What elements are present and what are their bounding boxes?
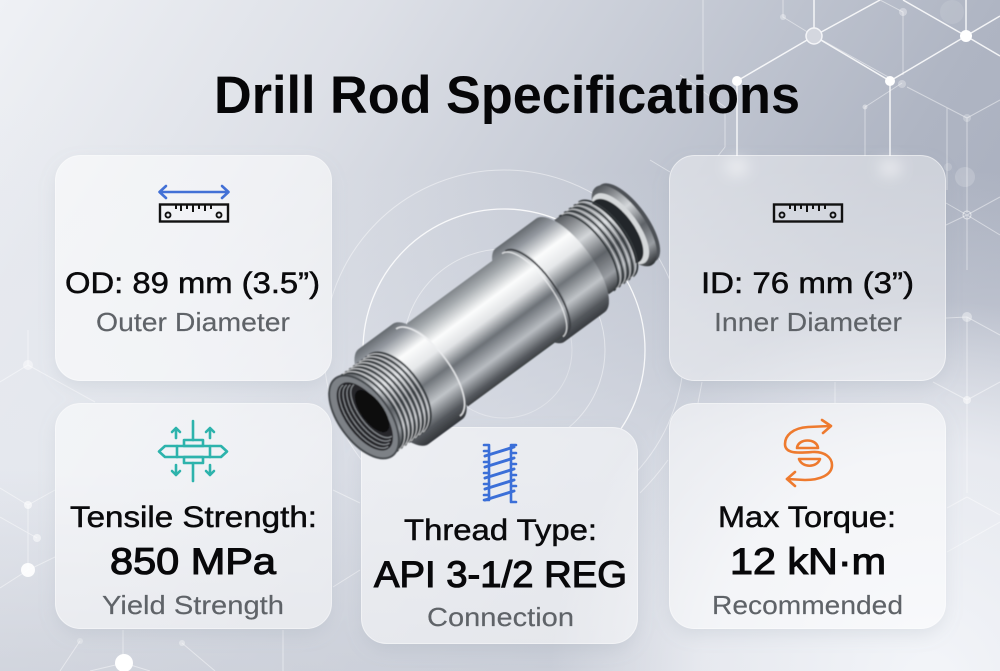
panel: tensile strength	[56, 404, 332, 628]
label: inner diameter: Inner Diameter	[714, 307, 902, 337]
title: Drill Rod Specifications	[214, 66, 800, 125]
concentric rings behind rod	[325, 170, 682, 470]
heading: max torque: Max Torque:	[718, 501, 896, 534]
value: thread type: API 3-1/2 REG	[374, 554, 627, 595]
far collar shoulder	[480, 236, 580, 354]
label: outer diameter: Outer Diameter	[96, 307, 290, 337]
icon: torque arrows	[785, 420, 832, 486]
body	[407, 239, 583, 406]
panel: outer diameter	[56, 156, 332, 380]
panel: torque	[670, 404, 946, 628]
far flange	[575, 173, 672, 280]
body seam	[505, 240, 582, 334]
panel: thread type	[362, 428, 638, 644]
icon: ruler with width arrow	[160, 186, 228, 222]
panel: inner diameter	[670, 156, 946, 380]
near collar	[359, 311, 480, 444]
drill rod	[310, 165, 679, 480]
near collar shoulder	[341, 336, 446, 457]
near collar seam	[396, 316, 478, 416]
heading: thread type: Thread Type:	[404, 514, 597, 547]
label: yield strength: Yield Strength	[102, 590, 284, 620]
label: recommended: Recommended	[712, 590, 903, 620]
near thread	[336, 340, 445, 455]
value: torque: 12 kN·m	[730, 541, 886, 582]
rod opening	[315, 364, 413, 470]
card glow	[725, 158, 902, 177]
icon: ruler	[774, 204, 842, 222]
icon: thread	[484, 445, 516, 502]
label: connection: Connection	[427, 602, 574, 632]
value: inner diameter: ID: 76 mm (3”)	[701, 267, 914, 300]
card shadows	[54, 371, 946, 648]
icon: tensile test	[159, 421, 227, 481]
far collar	[496, 206, 622, 342]
heading: tensile strength: Tensile Strength:	[70, 501, 317, 534]
far thread	[554, 190, 649, 294]
value: outer diameter: OD: 89 mm (3.5”)	[65, 267, 320, 300]
value: tensile strength: 850 MPa	[110, 541, 276, 582]
